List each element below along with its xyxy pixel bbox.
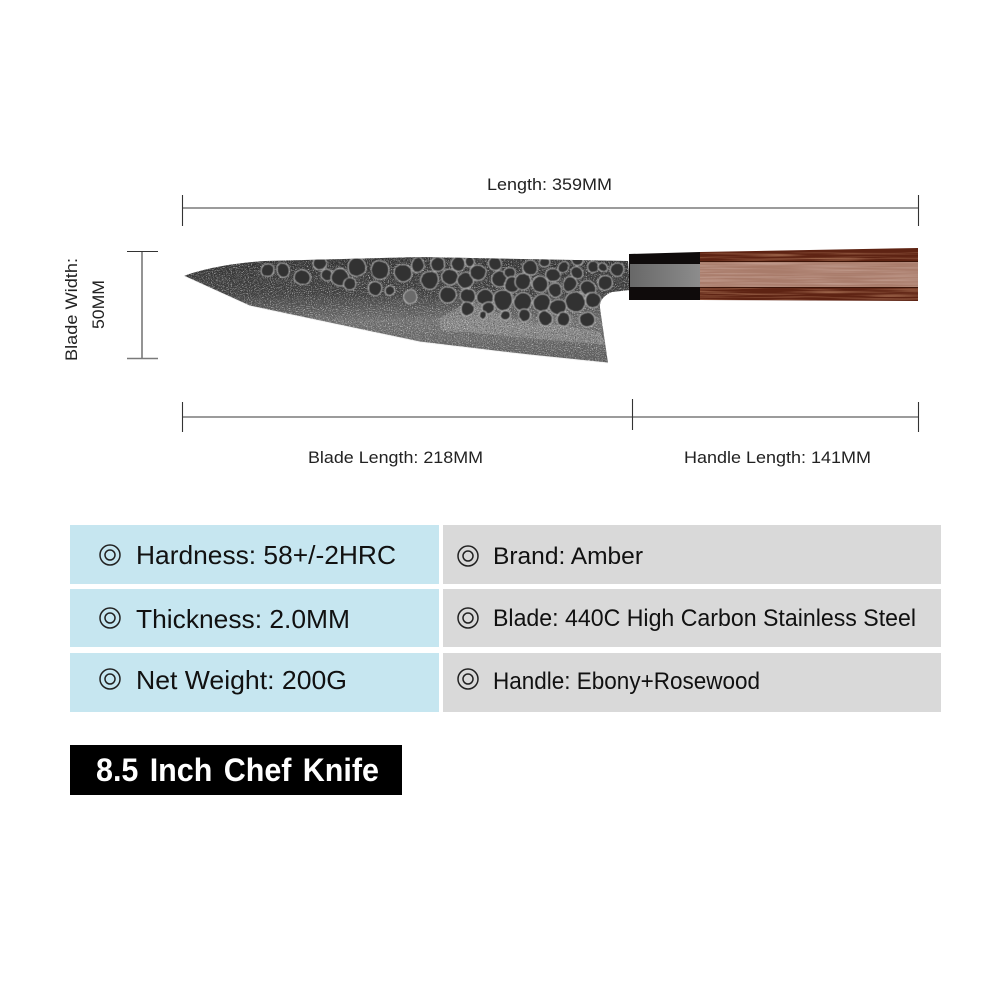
dimension: blade length: Blade Length: 218MM (308, 448, 483, 467)
title (70, 745, 402, 795)
spec row: brand (443, 525, 941, 584)
ferrule facet (630, 264, 700, 287)
spec row: handle material (443, 653, 941, 712)
spec row: hardness: Hardness: 58+/-2HRC (136, 540, 396, 570)
spec row: handle material: Handle: Ebony+Rosewood (493, 668, 760, 695)
spec row: blade material (443, 589, 941, 647)
dimension: blade width (62, 251, 158, 361)
blade (180, 254, 632, 367)
spec row: thickness (70, 589, 439, 647)
dimension: overall length: Length: 359MM (487, 175, 612, 194)
rosewood handle (700, 248, 918, 301)
title: 8.5 Inch Chef Knife (96, 752, 379, 788)
dimension: blade width: Blade Width: (62, 258, 81, 361)
dimension: handle length: Handle Length: 141MM (684, 448, 871, 467)
spec row: net weight: Net Weight: 200G (136, 665, 347, 695)
dimension: blade width: 50MM (89, 280, 108, 329)
blade edge highlight (184, 276, 608, 363)
spec row: blade material: Blade: 440C High Carbon Stainless Steel (493, 605, 916, 632)
ebony collar (629, 252, 700, 300)
spec row: brand: Brand: Amber (493, 543, 643, 570)
spec row: thickness: Thickness: 2.0MM (136, 604, 350, 634)
knife (180, 248, 918, 367)
spec row: hardness (70, 525, 439, 584)
hammered dimples (261, 254, 624, 328)
spec row: net weight (70, 653, 439, 712)
